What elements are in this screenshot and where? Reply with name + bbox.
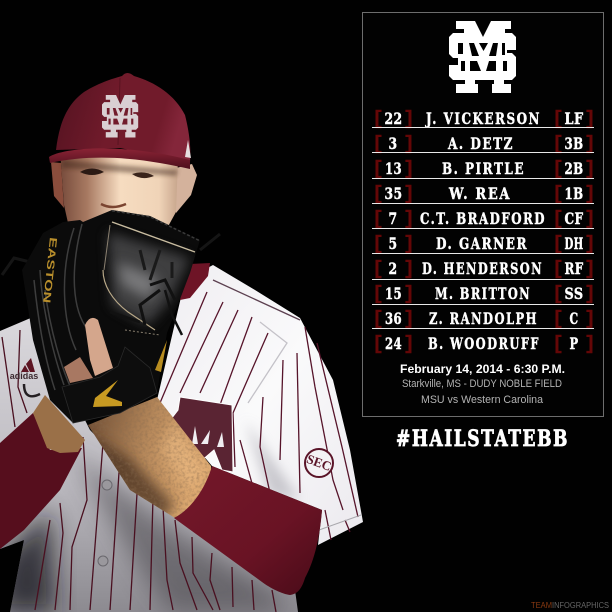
row: M. Britton: ] [403,283,415,305]
row: D. Garner: [ [372,233,384,255]
row: J. Vickerson: ] [403,108,415,130]
cap brim [49,148,190,169]
row: W. Rea: ] [403,183,415,205]
row: W. Rea: ] [584,183,596,205]
row: W. Rea: 1B [564,184,584,203]
row: Z. Randolph: [ [552,308,564,330]
row: J. Vickerson: 22 [384,109,402,128]
row: A. Detz: [ [372,133,384,155]
credit: INFOGRAPHICS [552,601,609,610]
row: J. Vickerson: [ [552,108,564,130]
row: J. Vickerson [372,108,596,130]
row: Z. Randolph: 36 [385,309,402,328]
row: M. Britton: [ [372,283,384,305]
row: C.T. Bradford: [ [372,208,384,230]
row: W. Rea: [ [372,183,384,205]
row: W. Rea: [ [552,183,564,205]
glove [2,210,220,423]
row: B. Woodruff: [ [552,333,564,355]
glove brand text: EASTON [40,237,59,304]
row: B. Pirtle: [ [552,158,564,180]
row: B. Woodruff: B. WOODRUFF [428,334,540,353]
row: D. Garner: ] [584,233,596,255]
row: D. Garner: D. GARNER [436,234,528,253]
row: C.T. Bradford: ] [403,208,415,230]
matchup: MSU vs Western Carolina [421,394,544,406]
cap adidas mark [185,140,191,158]
row: A. Detz: ] [584,133,596,155]
row: D. Garner: DH [564,234,584,253]
row: D. Garner: 5 [388,234,398,253]
row: D. Henderson: D. HENDERSON [422,259,543,278]
row: C.T. Bradford [372,208,596,230]
row: A. Detz: [ [552,133,564,155]
row: A. Detz [372,133,596,155]
row: W. Rea: 35 [384,184,402,203]
row: C.T. Bradford: [ [552,208,564,230]
face shading and eyes [62,160,178,207]
forearm [85,395,215,520]
lineup panel [362,12,604,416]
row: J. Vickerson: [ [372,108,384,130]
row: D. Henderson [372,258,596,280]
row: B. Woodruff: [ [372,333,384,355]
row: B. Pirtle: [ [372,158,384,180]
row: C.T. Bradford: CF [564,209,584,228]
row: B. Pirtle: ] [584,158,596,180]
row: B. Woodruff: ] [403,333,415,355]
adidas chest mark [10,358,40,396]
row: M. Britton: 15 [385,284,402,303]
row: C.T. Bradford: C.T. BRADFORD [420,209,546,228]
game date: February 14, 2014 - 6:30 P.M. [400,362,565,376]
cap seams [118,78,120,145]
row: D. Henderson: ] [584,258,596,280]
panel border [362,12,604,416]
row: J. Vickerson: J. VICKERSON [425,109,541,128]
row: B. Pirtle [372,158,596,180]
jersey buttons [98,480,112,566]
glove lace tail [165,290,182,335]
row: B. Pirtle: 13 [385,159,402,178]
glove laces [2,234,220,275]
row: B. Woodruff: ] [584,333,596,355]
row: Z. Randolph: Z. RANDOLPH [429,309,538,328]
row: D. Garner: ] [403,233,415,255]
row: C.T. Bradford: ] [584,208,596,230]
row: B. Pirtle: B. PIRTLE [442,159,525,178]
row: D. Henderson: [ [372,258,384,280]
face [60,158,178,225]
row: J. Vickerson: LF [564,109,584,128]
photo: baseball pitcher [0,73,363,612]
left arm sleeve [0,413,82,549]
fingers [64,318,113,383]
SEC patch: SEC [305,451,334,474]
brand chevron [93,380,122,407]
row: D. Henderson: ] [403,258,415,280]
row: Z. Randolph [372,308,596,330]
row: M. Britton: [ [552,283,564,305]
row: D. Henderson: [ [552,258,564,280]
row: B. Woodruff [372,333,596,355]
row: Z. Randolph: C [570,309,578,328]
row: W. Rea [372,183,596,205]
row: C.T. Bradford: 7 [388,209,398,228]
row: D. Henderson: RF [564,259,584,278]
row: D. Garner: [ [552,233,564,255]
row: W. Rea: W. REA [448,184,511,203]
row: J. Vickerson: ] [584,108,596,130]
row: D. Henderson: 2 [388,259,398,278]
row: B. Woodruff: 24 [385,334,402,353]
row: Z. Randolph: ] [403,308,415,330]
row: B. Woodruff: P [570,334,578,353]
row: A. Detz: 3 [388,134,398,153]
cap crown [56,73,190,162]
row: B. Pirtle: ] [403,158,415,180]
jersey sleeve [157,265,363,545]
row: A. Detz: ] [403,133,415,155]
row: Z. Randolph: ] [584,308,596,330]
team logo [449,21,516,93]
cap and head [49,73,197,235]
row: Z. Randolph: [ [372,308,384,330]
cap logo [102,95,138,137]
row: D. Garner [372,233,596,255]
row: M. Britton: M. BRITTON [435,284,531,303]
row: M. Britton: ] [584,283,596,305]
game venue: Starkville, MS - DUDY NOBLE FIELD [402,378,562,390]
row: M. Britton: SS [564,284,584,303]
row: A. Detz: A. DETZ [447,134,514,153]
ears [51,162,64,208]
chest logo [168,397,233,472]
jersey torso [0,310,310,612]
row: M. Britton [372,283,596,305]
collar [180,263,210,300]
credit: TEAM [531,601,552,610]
glove cuff [62,347,157,423]
row: A. Detz: 3B [564,134,584,153]
left wrist [33,395,85,453]
arm sleeve [174,466,322,595]
adidas chest mark: adidas [10,371,38,381]
row: B. Pirtle: 2B [564,159,584,178]
